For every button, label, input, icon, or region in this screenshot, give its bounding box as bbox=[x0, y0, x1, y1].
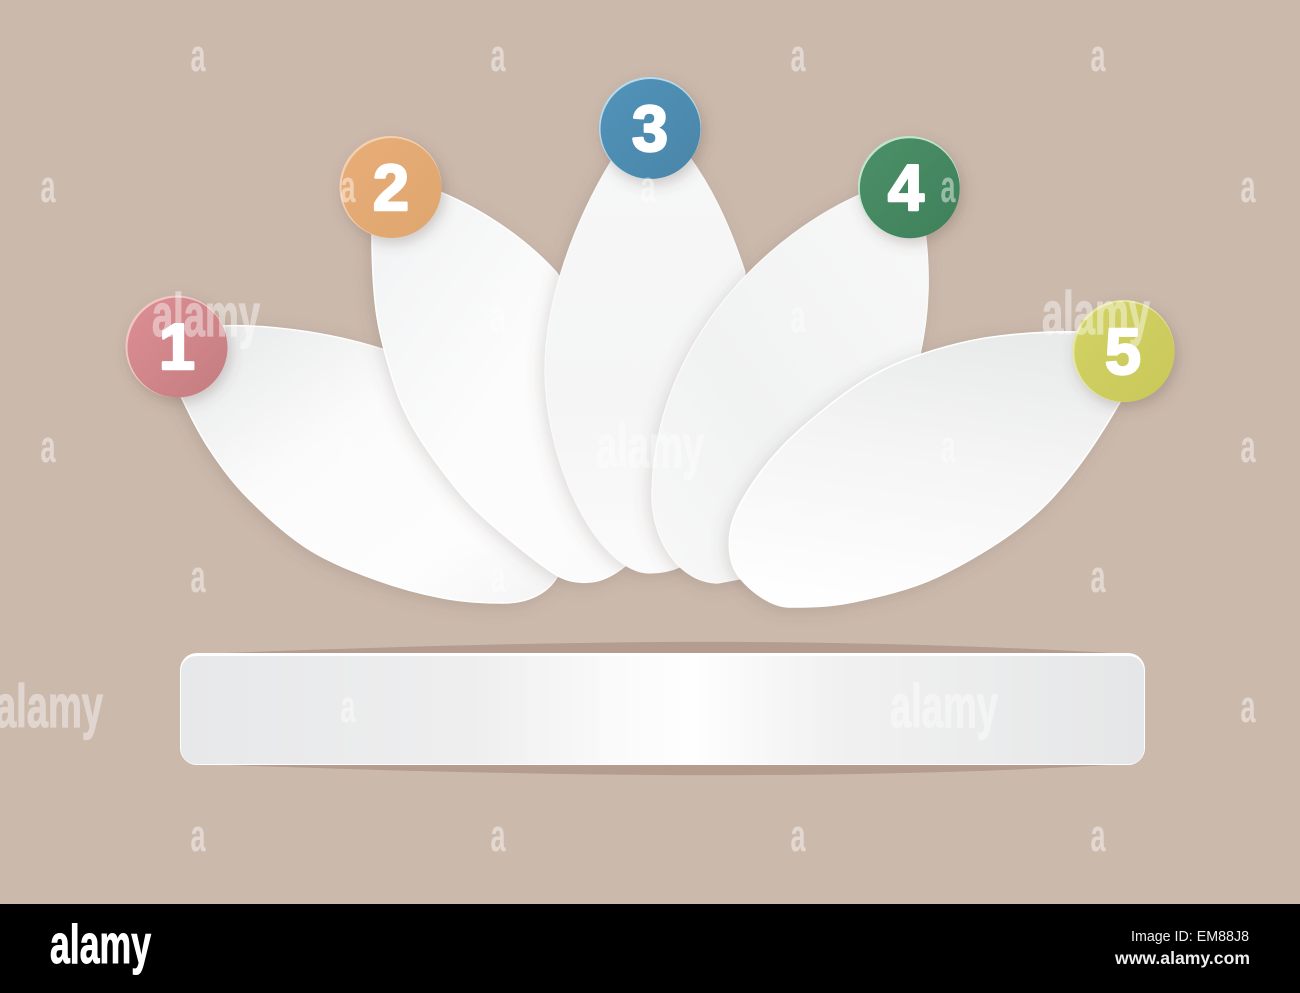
petal 4 bbox=[652, 192, 928, 583]
badge 5 bbox=[1072, 300, 1174, 402]
petal 2 bbox=[372, 188, 640, 582]
badge 2: 2 bbox=[373, 151, 409, 224]
petal 3 bbox=[545, 155, 745, 573]
watermarks: alamy bbox=[596, 413, 704, 480]
badge 2 bbox=[340, 136, 442, 238]
watermarks: a bbox=[490, 291, 506, 342]
watermarks: a bbox=[340, 421, 356, 472]
watermarks: a bbox=[1240, 161, 1256, 212]
watermarks: a bbox=[790, 291, 806, 342]
band shadow bottom bbox=[205, 764, 1125, 775]
watermarks: a bbox=[490, 551, 506, 602]
watermarks: a bbox=[190, 810, 206, 861]
badge 5: 5 bbox=[1105, 315, 1141, 388]
image id: Image ID: EM88J8 bbox=[1131, 929, 1249, 945]
watermarks: a bbox=[1090, 30, 1106, 81]
watermarks: a bbox=[940, 421, 956, 472]
watermarks: a bbox=[40, 161, 56, 212]
watermarks: a bbox=[190, 30, 206, 81]
watermarks: a bbox=[940, 161, 956, 212]
watermarks: a bbox=[340, 161, 356, 212]
badge 3 bbox=[599, 77, 701, 179]
watermarks: a bbox=[640, 161, 656, 212]
watermarks: a bbox=[1240, 681, 1256, 732]
footer logo: alamy bbox=[50, 913, 151, 975]
watermarks: alamy bbox=[890, 673, 998, 740]
badge 1: 1 bbox=[159, 310, 195, 383]
badge 4 bbox=[858, 136, 960, 238]
watermarks: a bbox=[340, 681, 356, 732]
watermarks: a bbox=[790, 551, 806, 602]
website: www.alamy.com bbox=[1114, 948, 1250, 968]
watermarks: a bbox=[790, 810, 806, 861]
badge 3: 3 bbox=[632, 92, 668, 165]
watermarks: a bbox=[40, 421, 56, 472]
watermarks: a bbox=[1090, 551, 1106, 602]
label band bbox=[180, 653, 1145, 765]
watermarks: a bbox=[1240, 421, 1256, 472]
watermarks: a bbox=[790, 30, 806, 81]
petal 1 bbox=[178, 326, 560, 603]
watermarks: a bbox=[190, 551, 206, 602]
watermarks: alamy bbox=[0, 673, 103, 740]
watermarks: a bbox=[1090, 810, 1106, 861]
band shadow top bbox=[200, 642, 1128, 654]
watermarks: a bbox=[490, 30, 506, 81]
badge 4: 4 bbox=[888, 151, 924, 224]
watermarks: alamy bbox=[152, 282, 260, 349]
watermarks: a bbox=[490, 810, 506, 861]
petal 5 bbox=[729, 332, 1120, 607]
watermarks: alamy bbox=[1042, 280, 1150, 347]
footer bar bbox=[0, 904, 1300, 993]
badge 1 bbox=[126, 296, 228, 398]
